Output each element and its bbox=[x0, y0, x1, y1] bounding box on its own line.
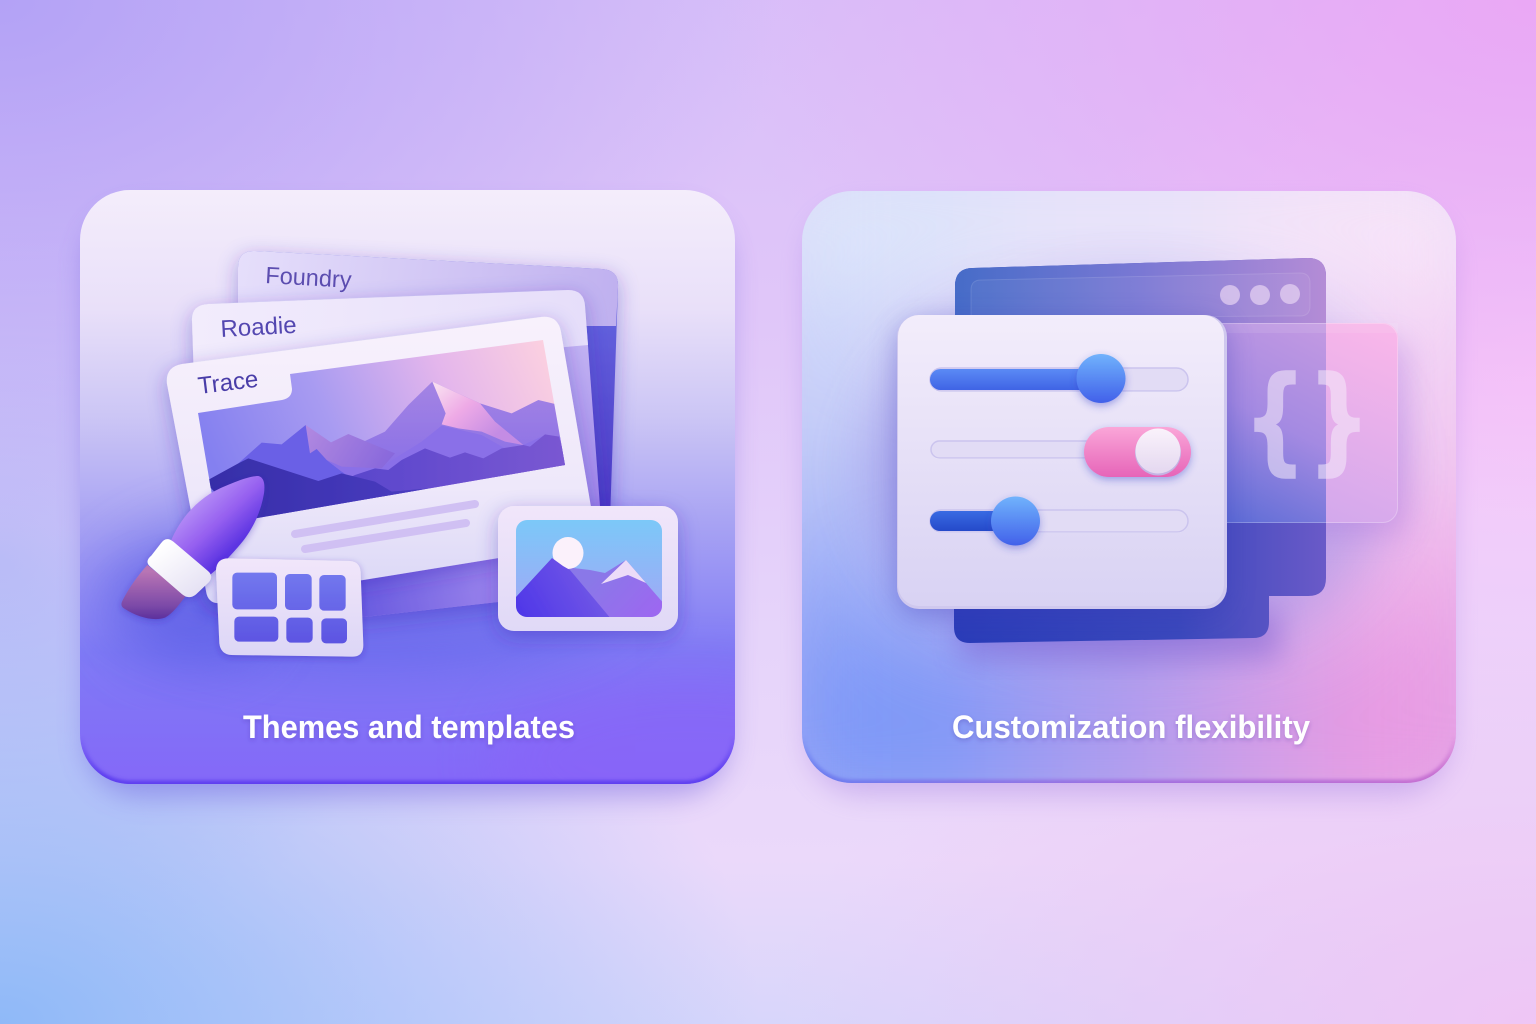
icon: curly braces: } bbox=[1308, 352, 1370, 487]
glass code panel bbox=[1222, 323, 1398, 523]
template card: Foundry: Foundry bbox=[265, 262, 352, 293]
toggle row bbox=[931, 427, 1191, 477]
panel: themes and templates bbox=[73, 190, 744, 811]
icon: paint brush bbox=[121, 476, 264, 619]
template card: Roadie bbox=[192, 290, 601, 617]
slider 1 bbox=[930, 354, 1188, 403]
heading: customization flexibility: Customization flexibility bbox=[952, 709, 1310, 745]
caption lines bbox=[295, 504, 475, 549]
mountain landscape image bbox=[198, 340, 565, 518]
template card: Trace bbox=[167, 317, 597, 603]
icon: grid layout card bbox=[216, 558, 363, 657]
back window: lower layer bbox=[954, 340, 1269, 643]
icon: picture card bbox=[498, 506, 678, 631]
template card: Trace: Trace bbox=[196, 366, 260, 400]
front settings panel bbox=[897, 315, 1227, 616]
icon: curly braces: { bbox=[1244, 352, 1306, 487]
window dots bbox=[1220, 284, 1300, 305]
back window: upper layer bbox=[955, 258, 1326, 596]
heading: themes and templates: Themes and templates bbox=[243, 709, 575, 745]
template card: Roadie: Roadie bbox=[220, 312, 297, 343]
template card: Foundry bbox=[238, 251, 618, 520]
panel: customization flexibility bbox=[798, 191, 1460, 805]
slider 3 bbox=[930, 496, 1188, 546]
icon: curly braces bbox=[1244, 352, 1370, 487]
